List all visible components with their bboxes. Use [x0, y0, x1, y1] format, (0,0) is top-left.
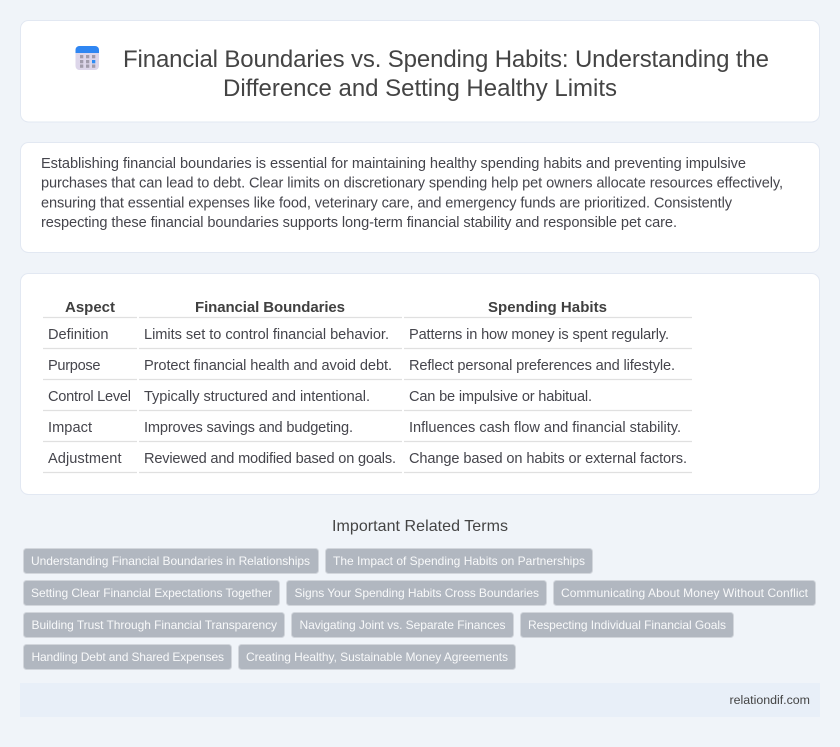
tag	[24, 548, 318, 574]
table row: definition: Patterns in how money is spent regularly.	[409, 327, 669, 343]
panel: introduction	[20, 142, 820, 252]
tag	[24, 580, 280, 606]
table row: adjustment	[48, 451, 687, 467]
tag	[326, 548, 592, 574]
footer bar	[20, 683, 820, 717]
tag	[24, 644, 232, 670]
tag: Respecting Individual Financial Goals	[528, 618, 726, 632]
tag: Handling Debt and Shared Expenses	[32, 650, 224, 664]
table row: adjustment: Change based on habits or external factors.	[409, 451, 687, 467]
panel: comparison table	[20, 274, 820, 494]
table row: adjustment: Adjustment	[48, 451, 122, 467]
table row: control level: Control Level	[48, 389, 131, 405]
table row: impact: Influences cash flow and financial stability.	[409, 420, 681, 436]
table row: impact: Improves savings and budgeting.	[144, 420, 353, 436]
table row: control level: Typically structured and intentional.	[144, 389, 370, 405]
table header row: Financial Boundaries	[195, 299, 345, 316]
intro paragraph	[41, 156, 783, 231]
intro paragraph: respecting these financial boundaries supports long-term financial stability and responsible pet care.	[41, 215, 677, 231]
title: Financial Boundaries vs. Spending Habits: Understanding the	[123, 46, 769, 73]
tag: Navigating Joint vs. Separate Finances	[300, 618, 506, 632]
table row: purpose: Purpose	[48, 358, 100, 374]
tag: Building Trust Through Financial Transparency	[32, 618, 277, 632]
table header row	[65, 299, 607, 316]
tag	[24, 612, 284, 638]
intro paragraph: Establishing financial boundaries is essential for maintaining healthy spending habits and preventing impulsive	[41, 156, 746, 172]
icon: calendar	[76, 46, 99, 70]
footer bar: relationdif.com	[730, 693, 810, 707]
title: Difference and Setting Healthy Limits	[223, 75, 617, 102]
tag	[554, 580, 816, 606]
table row: impact: Impact	[48, 420, 92, 436]
table row: control level: Can be impulsive or habitual.	[409, 389, 592, 405]
tag: Communicating About Money Without Conflict	[561, 586, 809, 600]
tag	[286, 580, 546, 606]
table row: definition: Definition	[48, 327, 108, 343]
intro paragraph: ensuring that essential expenses like food, veterinary care, and emergency funds are prioritized. Consistently	[41, 196, 733, 212]
table row: adjustment: Reviewed and modified based on goals.	[144, 451, 396, 467]
tag: Understanding Financial Boundaries in Relationships	[31, 554, 310, 568]
tag	[292, 612, 514, 638]
table row: purpose: Reflect personal preferences and lifestyle.	[409, 358, 675, 374]
tag	[520, 612, 734, 638]
related terms tags	[24, 548, 816, 670]
table row: purpose: Protect financial health and avoid debt.	[144, 358, 392, 374]
tag	[238, 644, 516, 670]
tag: Setting Clear Financial Expectations Together	[31, 586, 272, 600]
panel: header	[20, 20, 820, 122]
table row: definition: Limits set to control financial behavior.	[144, 327, 389, 343]
tag: Creating Healthy, Sustainable Money Agreements	[246, 650, 508, 664]
tag: The Impact of Spending Habits on Partnerships	[333, 554, 585, 568]
tag: Signs Your Spending Habits Cross Boundaries	[294, 586, 539, 600]
table header row: Spending Habits	[488, 299, 607, 316]
table header row: Aspect	[65, 299, 115, 316]
intro paragraph: purchases that can lead to debt. Clear limits on discretionary spending help pet owners allocate resources effectively,	[41, 176, 783, 192]
table row: purpose	[48, 358, 675, 374]
table row: control level	[48, 389, 592, 405]
table row: impact	[48, 420, 681, 436]
heading: related terms: Important Related Terms	[332, 518, 508, 535]
table row: definition	[48, 327, 669, 343]
title	[123, 46, 769, 102]
